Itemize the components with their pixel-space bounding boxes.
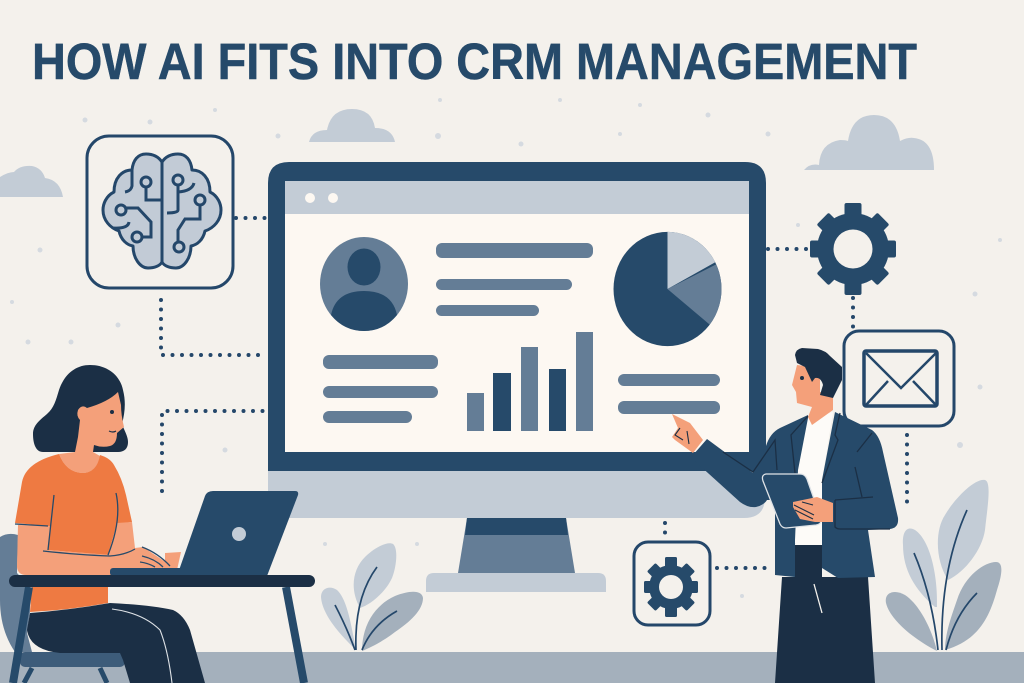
woman at desk: [0, 365, 304, 683]
head: [792, 365, 833, 425]
hair: [795, 348, 842, 398]
screen: [285, 181, 749, 452]
holding hand: [793, 497, 833, 522]
icon: AI brain: [87, 136, 233, 288]
shirt: [795, 412, 833, 545]
profile avatar: [320, 237, 408, 331]
pie chart: [614, 232, 721, 346]
legs: [27, 603, 205, 683]
text bars: [323, 243, 720, 423]
forearm and hand: [108, 522, 170, 575]
icon: email: [844, 331, 954, 426]
desk legs: [13, 587, 304, 683]
plant: left: [321, 543, 423, 651]
jacket seams: [723, 413, 890, 529]
arm: [17, 525, 112, 575]
chair: [0, 534, 32, 652]
cloud: left: [0, 166, 63, 197]
icon: small gear: [634, 542, 710, 625]
monitor: [268, 162, 766, 592]
dotted connectors: [161, 218, 907, 568]
tablet: [762, 474, 821, 528]
monitor bezel: [268, 162, 766, 471]
jacket: right front and sleeve: [822, 412, 898, 578]
shirt: [15, 454, 132, 555]
jacket: left front and arm: [693, 415, 808, 577]
man presenting: [672, 348, 898, 683]
monitor stand: [458, 518, 575, 573]
laptop: [110, 491, 298, 576]
bar chart: [467, 332, 593, 431]
neck and face: [59, 392, 124, 473]
cloud: top right: [804, 115, 934, 170]
title: HOW AI FITS INTO CRM MANAGEMENT: [32, 33, 917, 90]
hair: [33, 365, 128, 452]
floor: [0, 652, 1024, 683]
icon: gear: [810, 203, 896, 295]
pointing hand: [672, 414, 703, 453]
trousers: [775, 543, 875, 683]
desk: [9, 575, 315, 587]
plant: right: [886, 480, 1001, 651]
browser bar: [285, 181, 749, 214]
cloud: top center: [309, 109, 395, 142]
monitor chin: [268, 470, 765, 518]
